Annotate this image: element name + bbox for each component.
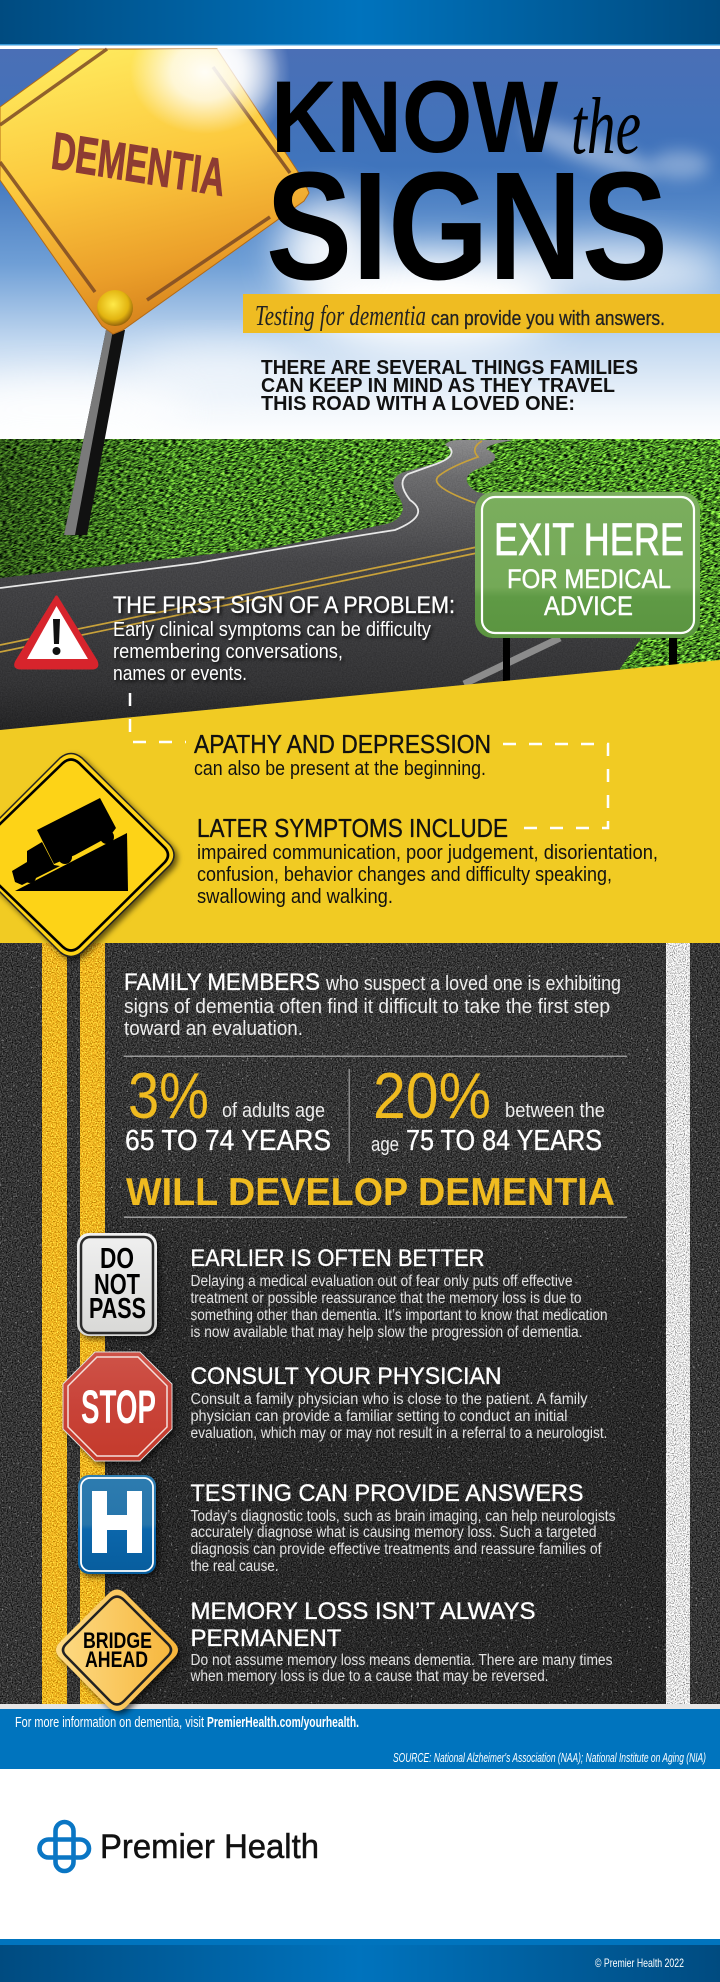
family members text: signs of dementia often find it difficult to take the first step bbox=[124, 996, 610, 1018]
testing can provide answers: accurately diagnose what is causing memory loss. Such a targeted bbox=[190, 1524, 596, 1541]
footer blue band bbox=[0, 1704, 720, 1769]
consult your physician: CONSULT YOUR PHYSICIAN bbox=[190, 1363, 502, 1390]
bottom blue bar bbox=[0, 1939, 720, 1982]
statistic: 20 percent: 20% bbox=[373, 1059, 491, 1132]
yellow centre lines bbox=[42, 943, 105, 1704]
consult your physician: physician can provide a familiar setting to conduct an initial bbox=[190, 1408, 568, 1425]
earlier is often better: treatment or possible reassurance that the memory loss is due to bbox=[190, 1290, 582, 1307]
sign face bbox=[0, 49, 309, 334]
icon: do not pass sign: NOT bbox=[94, 1269, 140, 1301]
statistic: 20 percent: age bbox=[371, 1134, 399, 1156]
first sign text: Early clinical symptoms can be difficulty bbox=[113, 619, 431, 641]
sign label: DEMENTIA bbox=[49, 122, 228, 208]
white logo area bbox=[0, 1769, 720, 1939]
first sign text: remembering conversations, bbox=[113, 641, 343, 663]
first sign text: THE FIRST SIGN OF A PROBLEM: bbox=[113, 592, 455, 619]
icon: do not pass sign bbox=[77, 1233, 157, 1336]
apathy text: can also be present at the beginning. bbox=[194, 758, 486, 780]
statistic: 3 percent: of adults age bbox=[222, 1100, 325, 1122]
logo: premier health bbox=[40, 1822, 319, 1871]
dashed connector one bbox=[130, 693, 186, 742]
road centre yellow lines bbox=[0, 441, 482, 652]
statistic: 20 percent: 75 TO 84 YEARS bbox=[406, 1125, 602, 1157]
will develop dementia heading: WILL DEVELOP DEMENTIA bbox=[126, 1171, 615, 1214]
icon: stop sign bbox=[63, 1352, 172, 1461]
family members text bbox=[124, 969, 621, 1040]
icon: truck on hill diamond bbox=[0, 754, 174, 956]
apathy text bbox=[194, 729, 491, 780]
icon: do not pass sign: DO bbox=[100, 1243, 134, 1275]
statistic: 20 percent: between the bbox=[505, 1100, 605, 1122]
later symptoms text: swallowing and walking. bbox=[197, 886, 393, 908]
truck and ramp bbox=[12, 798, 128, 891]
statistic: 3 percent: 65 TO 74 YEARS bbox=[125, 1125, 331, 1157]
road white lane bbox=[464, 638, 560, 684]
consult your physician: Consult a family physician who is close to the patient. A family bbox=[190, 1391, 588, 1408]
white edge line bbox=[666, 943, 690, 1704]
logo icon bbox=[40, 1822, 89, 1871]
title: KNOW bbox=[271, 60, 559, 174]
memory loss isn't always permanent: PERMANENT bbox=[190, 1625, 342, 1652]
later symptoms text: confusion, behavior changes and difficulty speaking, bbox=[197, 864, 612, 886]
footer info bbox=[15, 1715, 706, 1765]
earlier is often better bbox=[190, 1245, 608, 1341]
exit here sign: FOR MEDICAL bbox=[507, 564, 671, 594]
exit here sign bbox=[475, 492, 700, 690]
testing can provide answers: diagnosis can provide effective treatments and reassure families of bbox=[190, 1541, 602, 1558]
earlier is often better: is now available that may help slow the progression of dementia. bbox=[190, 1324, 582, 1341]
first sign text: names or events. bbox=[113, 663, 247, 685]
earlier is often better: Delaying a medical evaluation out of fear only puts off effective bbox=[190, 1273, 572, 1290]
family members text: toward an evaluation. bbox=[124, 1018, 303, 1040]
icon: bridge ahead sign bbox=[56, 1590, 178, 1711]
icon: do not pass sign: PASS bbox=[89, 1293, 146, 1325]
intro text: THERE ARE SEVERAL THINGS FAMILIES bbox=[261, 357, 638, 379]
hero sky background bbox=[0, 49, 720, 420]
top blue bar bbox=[0, 0, 720, 49]
icon: stop sign: STOP bbox=[81, 1380, 156, 1433]
icon: hospital sign bbox=[78, 1475, 156, 1574]
logo: premier health: Premier Health bbox=[100, 1828, 319, 1866]
statistic: 20 percent bbox=[371, 1059, 605, 1157]
family members text: FAMILY MEMBERS bbox=[124, 969, 320, 996]
testing can provide answers: TESTING CAN PROVIDE ANSWERS bbox=[190, 1480, 584, 1507]
road bbox=[0, 440, 660, 745]
footer info: PremierHealth.com/yourhealth. bbox=[207, 1715, 359, 1731]
yellow band bbox=[0, 660, 720, 943]
tagline banner: Testing for dementia bbox=[255, 301, 426, 332]
sign bolt bbox=[97, 290, 133, 326]
family members text: who suspect a loved one is exhibiting bbox=[325, 973, 621, 995]
later symptoms text: LATER SYMPTOMS INCLUDE bbox=[197, 813, 508, 843]
asphalt panel bbox=[0, 943, 720, 1704]
icon: warning triangle bbox=[16, 597, 97, 668]
hero sign: dementia diamond bbox=[0, 10, 309, 535]
title: the bbox=[571, 83, 641, 171]
road edge line bbox=[0, 447, 452, 588]
tagline banner bbox=[243, 294, 720, 333]
intro text bbox=[261, 357, 638, 415]
testing can provide answers: Today’s diagnostic tools, such as brain imaging, can help neurologists bbox=[190, 1508, 616, 1525]
later symptoms text bbox=[197, 813, 658, 908]
later symptoms text: impaired communication, poor judgement, disorientation, bbox=[197, 842, 658, 864]
intro text: THIS ROAD WITH A LOVED ONE: bbox=[261, 393, 575, 415]
first sign text bbox=[113, 592, 455, 685]
icon: bridge ahead sign: BRIDGE bbox=[83, 1628, 152, 1653]
grass bbox=[0, 439, 720, 670]
consult your physician bbox=[190, 1363, 608, 1442]
memory loss isn't always permanent bbox=[190, 1598, 613, 1685]
apathy text: APATHY AND DEPRESSION bbox=[194, 729, 491, 759]
memory loss isn't always permanent: when memory loss is due to a cause that may be reversed. bbox=[190, 1668, 548, 1685]
memory loss isn't always permanent: Do not assume memory loss means dementia. There are many times bbox=[190, 1652, 613, 1669]
consult your physician: evaluation, which may or may not result in a referral to a neurologist. bbox=[190, 1425, 608, 1442]
testing can provide answers: the real cause. bbox=[190, 1558, 278, 1575]
memory loss isn't always permanent: MEMORY LOSS ISN’T ALWAYS bbox=[190, 1598, 536, 1625]
bottom blue bar: © Premier Health 2022 bbox=[595, 1956, 684, 1970]
sign border lines bbox=[0, 49, 290, 300]
exit here sign: ADVICE bbox=[544, 591, 633, 621]
icon: bridge ahead sign: AHEAD bbox=[85, 1647, 148, 1672]
statistic: 3 percent: 3% bbox=[128, 1059, 209, 1132]
earlier is often better: something other than dementia. It’s important to know that medication bbox=[190, 1307, 608, 1324]
earlier is often better: EARLIER IS OFTEN BETTER bbox=[190, 1245, 484, 1272]
testing can provide answers bbox=[190, 1480, 616, 1575]
title bbox=[266, 60, 668, 312]
footer info: For more information on dementia, visit bbox=[15, 1715, 204, 1731]
statistic: 3 percent bbox=[125, 1059, 331, 1157]
dashed connector two bbox=[503, 744, 608, 828]
intro text: CAN KEEP IN MIND AS THEY TRAVEL bbox=[261, 375, 615, 397]
tagline banner: can provide you with answers. bbox=[431, 308, 665, 330]
sign post bbox=[64, 330, 125, 535]
